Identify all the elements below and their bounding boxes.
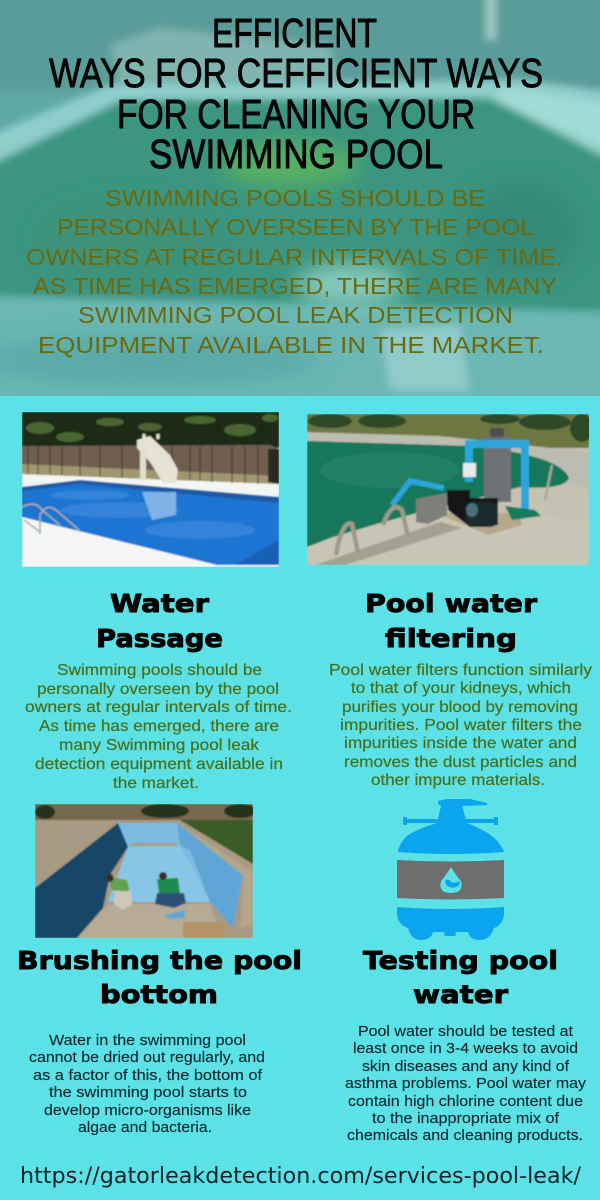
text: testing pool water: contain high chlorine content due <box>348 1093 583 1110</box>
text: water passage: detection equipment available in <box>35 756 283 773</box>
text: testing pool water: asthma problems. Pool water may <box>345 1075 586 1092</box>
intro text: PERSONALLY OVERSEEN BY THE POOL <box>57 214 534 240</box>
photo: pool with slide <box>22 412 279 567</box>
title <box>49 10 543 177</box>
title: SWIMMING POOL <box>149 131 443 177</box>
icon: pool sand filter tank with water drop <box>397 799 504 940</box>
text: testing pool water <box>345 1023 586 1144</box>
intro text: AS TIME HAS EMERGED, THERE ARE MANY <box>33 273 557 299</box>
heading: testing pool water: Testing pool <box>363 946 558 975</box>
title: FOR CLEANING YOUR <box>117 91 475 137</box>
intro text: EQUIPMENT AVAILABLE IN THE MARKET. <box>38 332 544 358</box>
text: pool water filtering: impurities inside the water and <box>344 735 577 752</box>
text: water passage: Swimming pools should be <box>57 662 262 679</box>
text: brushing the pool bottom: develop micro-organisms like <box>44 1102 251 1119</box>
heading: water passage: Water <box>110 589 210 618</box>
intro text <box>26 185 563 358</box>
text: testing pool water: to the inappropriate mix of <box>372 1110 560 1127</box>
text: testing pool water: chemicals and cleaning products. <box>347 1127 583 1144</box>
photo: pool filter pump <box>307 414 594 565</box>
text: water passage: As time has emerged, there are <box>39 718 279 735</box>
heading: pool water filtering <box>365 589 538 653</box>
heading: pool water filtering: Pool water <box>365 589 538 618</box>
text: brushing the pool bottom <box>29 1032 265 1136</box>
text: brushing the pool bottom: as a factor of this, the bottom of <box>33 1067 263 1084</box>
heading: brushing the pool bottom: bottom <box>100 980 218 1009</box>
text: pool water filtering: purifies your blood by removing <box>342 699 578 716</box>
heading: testing pool water: water <box>413 980 509 1009</box>
text: water passage: many Swimming pool leak <box>59 737 260 754</box>
website url: https://gatorleakdetection.com/services-pool-leak/ <box>20 1164 582 1189</box>
text: pool water filtering: removes the dust particles and <box>344 754 577 771</box>
heading: pool water filtering: filtering <box>385 624 517 653</box>
text: brushing the pool bottom: cannot be dried out regularly, and <box>29 1049 265 1066</box>
intro text: SWIMMING POOLS SHOULD BE <box>105 185 485 211</box>
photo: workers in empty pool <box>35 804 256 938</box>
text: pool water filtering <box>329 662 592 789</box>
heading: testing pool water <box>363 946 558 1009</box>
text: pool water filtering: impurities. Pool water filters the <box>340 717 582 734</box>
heading: water passage <box>96 589 223 653</box>
intro text: SWIMMING POOL LEAK DETECTION <box>78 302 513 328</box>
hero background: pool photo <box>0 0 600 410</box>
text: pool water filtering: other impure materials. <box>371 772 545 789</box>
text: water passage: personally overseen by the pool <box>37 681 279 698</box>
heading: brushing the pool bottom <box>17 946 302 1009</box>
text: pool water filtering: Pool water filters function similarly <box>329 662 592 679</box>
heading: water passage: Passage <box>96 624 223 653</box>
text: pool water filtering: to that of your kidneys, which <box>351 680 571 697</box>
intro text: OWNERS AT REGULAR INTERVALS OF TIME. <box>26 244 563 270</box>
text: brushing the pool bottom: algae and bacteria. <box>78 1119 212 1136</box>
title: EFFICIENT <box>212 10 377 56</box>
text: water passage: owners at regular intervals of time. <box>25 699 292 716</box>
text: testing pool water: skin diseases and any kind of <box>362 1058 570 1075</box>
text: brushing the pool bottom: the swimming pool starts to <box>49 1084 247 1101</box>
text: brushing the pool bottom: Water in the swimming pool <box>49 1032 246 1049</box>
text: testing pool water: least once in 3-4 weeks to avoid <box>353 1040 578 1057</box>
text: water passage: the market. <box>113 775 199 792</box>
text: testing pool water: Pool water should be tested at <box>358 1023 574 1040</box>
heading: brushing the pool bottom: Brushing the pool <box>17 946 302 975</box>
text: water passage <box>25 662 292 792</box>
